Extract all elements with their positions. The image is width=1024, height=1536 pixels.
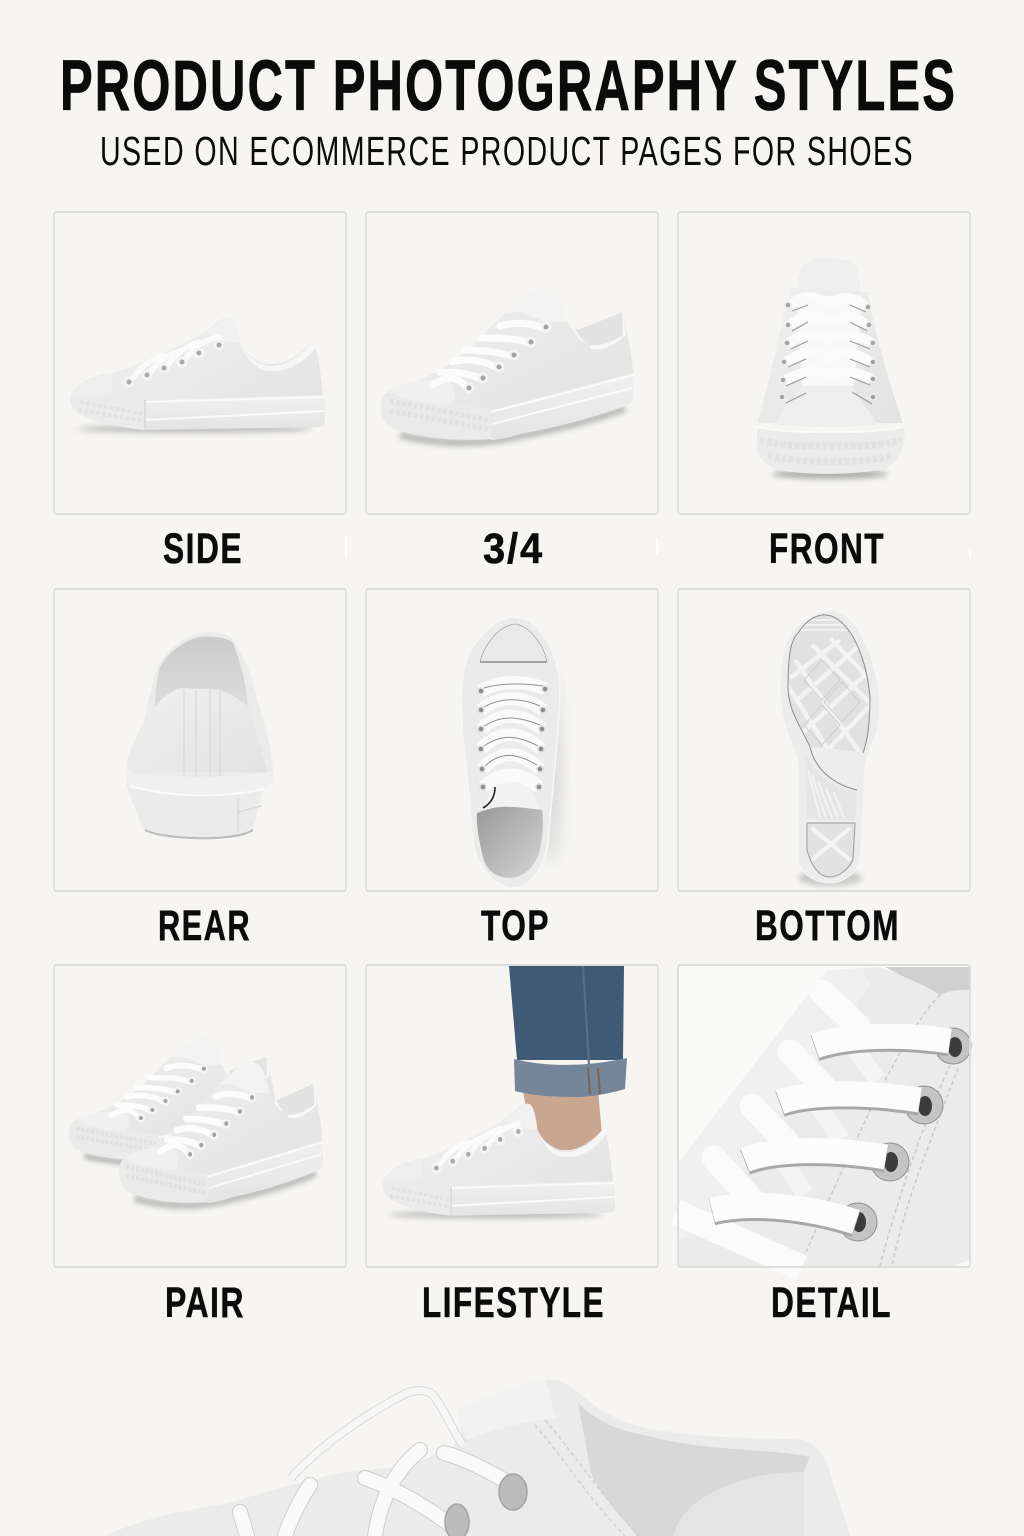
- ankle: [523, 1090, 605, 1150]
- hero laces: [240, 1450, 516, 1536]
- panel: top view: [366, 589, 658, 891]
- panel: three-quarter view: [366, 212, 658, 514]
- label: lifestyle: LIFESTYLE: [422, 1279, 605, 1327]
- shoe: back of pair: [69, 1038, 276, 1162]
- panel: detail: [676, 965, 971, 1268]
- arch: [810, 747, 863, 790]
- label artifact marks: [345, 536, 971, 558]
- label: top: TOP: [481, 902, 550, 950]
- jeans cuff: [514, 1058, 627, 1097]
- label: side: SIDE: [163, 525, 243, 573]
- detail corner shadow: [885, 967, 969, 995]
- panel: pair: [54, 965, 346, 1267]
- hero shoe cropped at bottom: [105, 1380, 850, 1536]
- hero upper: [105, 1380, 850, 1536]
- shoe: side: [70, 317, 325, 432]
- shoe: rear: [126, 632, 273, 838]
- detail frame: [678, 965, 970, 1267]
- label: bottom: BOTTOM: [755, 902, 900, 950]
- detail eyelets: [839, 1028, 971, 1241]
- hero stitching: [535, 1420, 640, 1536]
- detail leather: [679, 967, 969, 1266]
- shoe: top: [461, 617, 561, 888]
- panel: rear view: [54, 589, 346, 891]
- hero lace tail: [291, 1391, 463, 1478]
- panel: bottom view: [678, 589, 970, 891]
- panel: lifestyle: [366, 965, 658, 1267]
- shoe: bottom sole: [780, 610, 880, 886]
- jeans leg: [509, 966, 624, 1060]
- panel: side view: [54, 212, 346, 514]
- label: 3/4: 3/4: [483, 525, 544, 573]
- hero collar lining: [457, 1380, 557, 1440]
- hero heel pad: [673, 1472, 804, 1536]
- shoe: front of pair: [119, 1062, 323, 1205]
- detail laces: [676, 992, 950, 1268]
- detail eyelet holes: [852, 1037, 962, 1232]
- tread pattern: [788, 616, 870, 752]
- hero eyelets: [445, 1474, 527, 1536]
- detail stitching: [800, 995, 958, 1266]
- hero interior: [578, 1403, 810, 1536]
- shoe: three-quarter: [381, 289, 634, 443]
- shoe: lifestyle: [383, 1104, 615, 1218]
- detail facing band: [679, 968, 870, 1240]
- heel tread: [807, 823, 855, 877]
- label: detail: DETAIL: [771, 1279, 892, 1327]
- label: rear: REAR: [158, 902, 251, 950]
- panel: front view: [678, 212, 970, 514]
- shoe: front: [757, 258, 905, 479]
- label: front: FRONT: [769, 525, 885, 573]
- label: pair: PAIR: [165, 1279, 245, 1327]
